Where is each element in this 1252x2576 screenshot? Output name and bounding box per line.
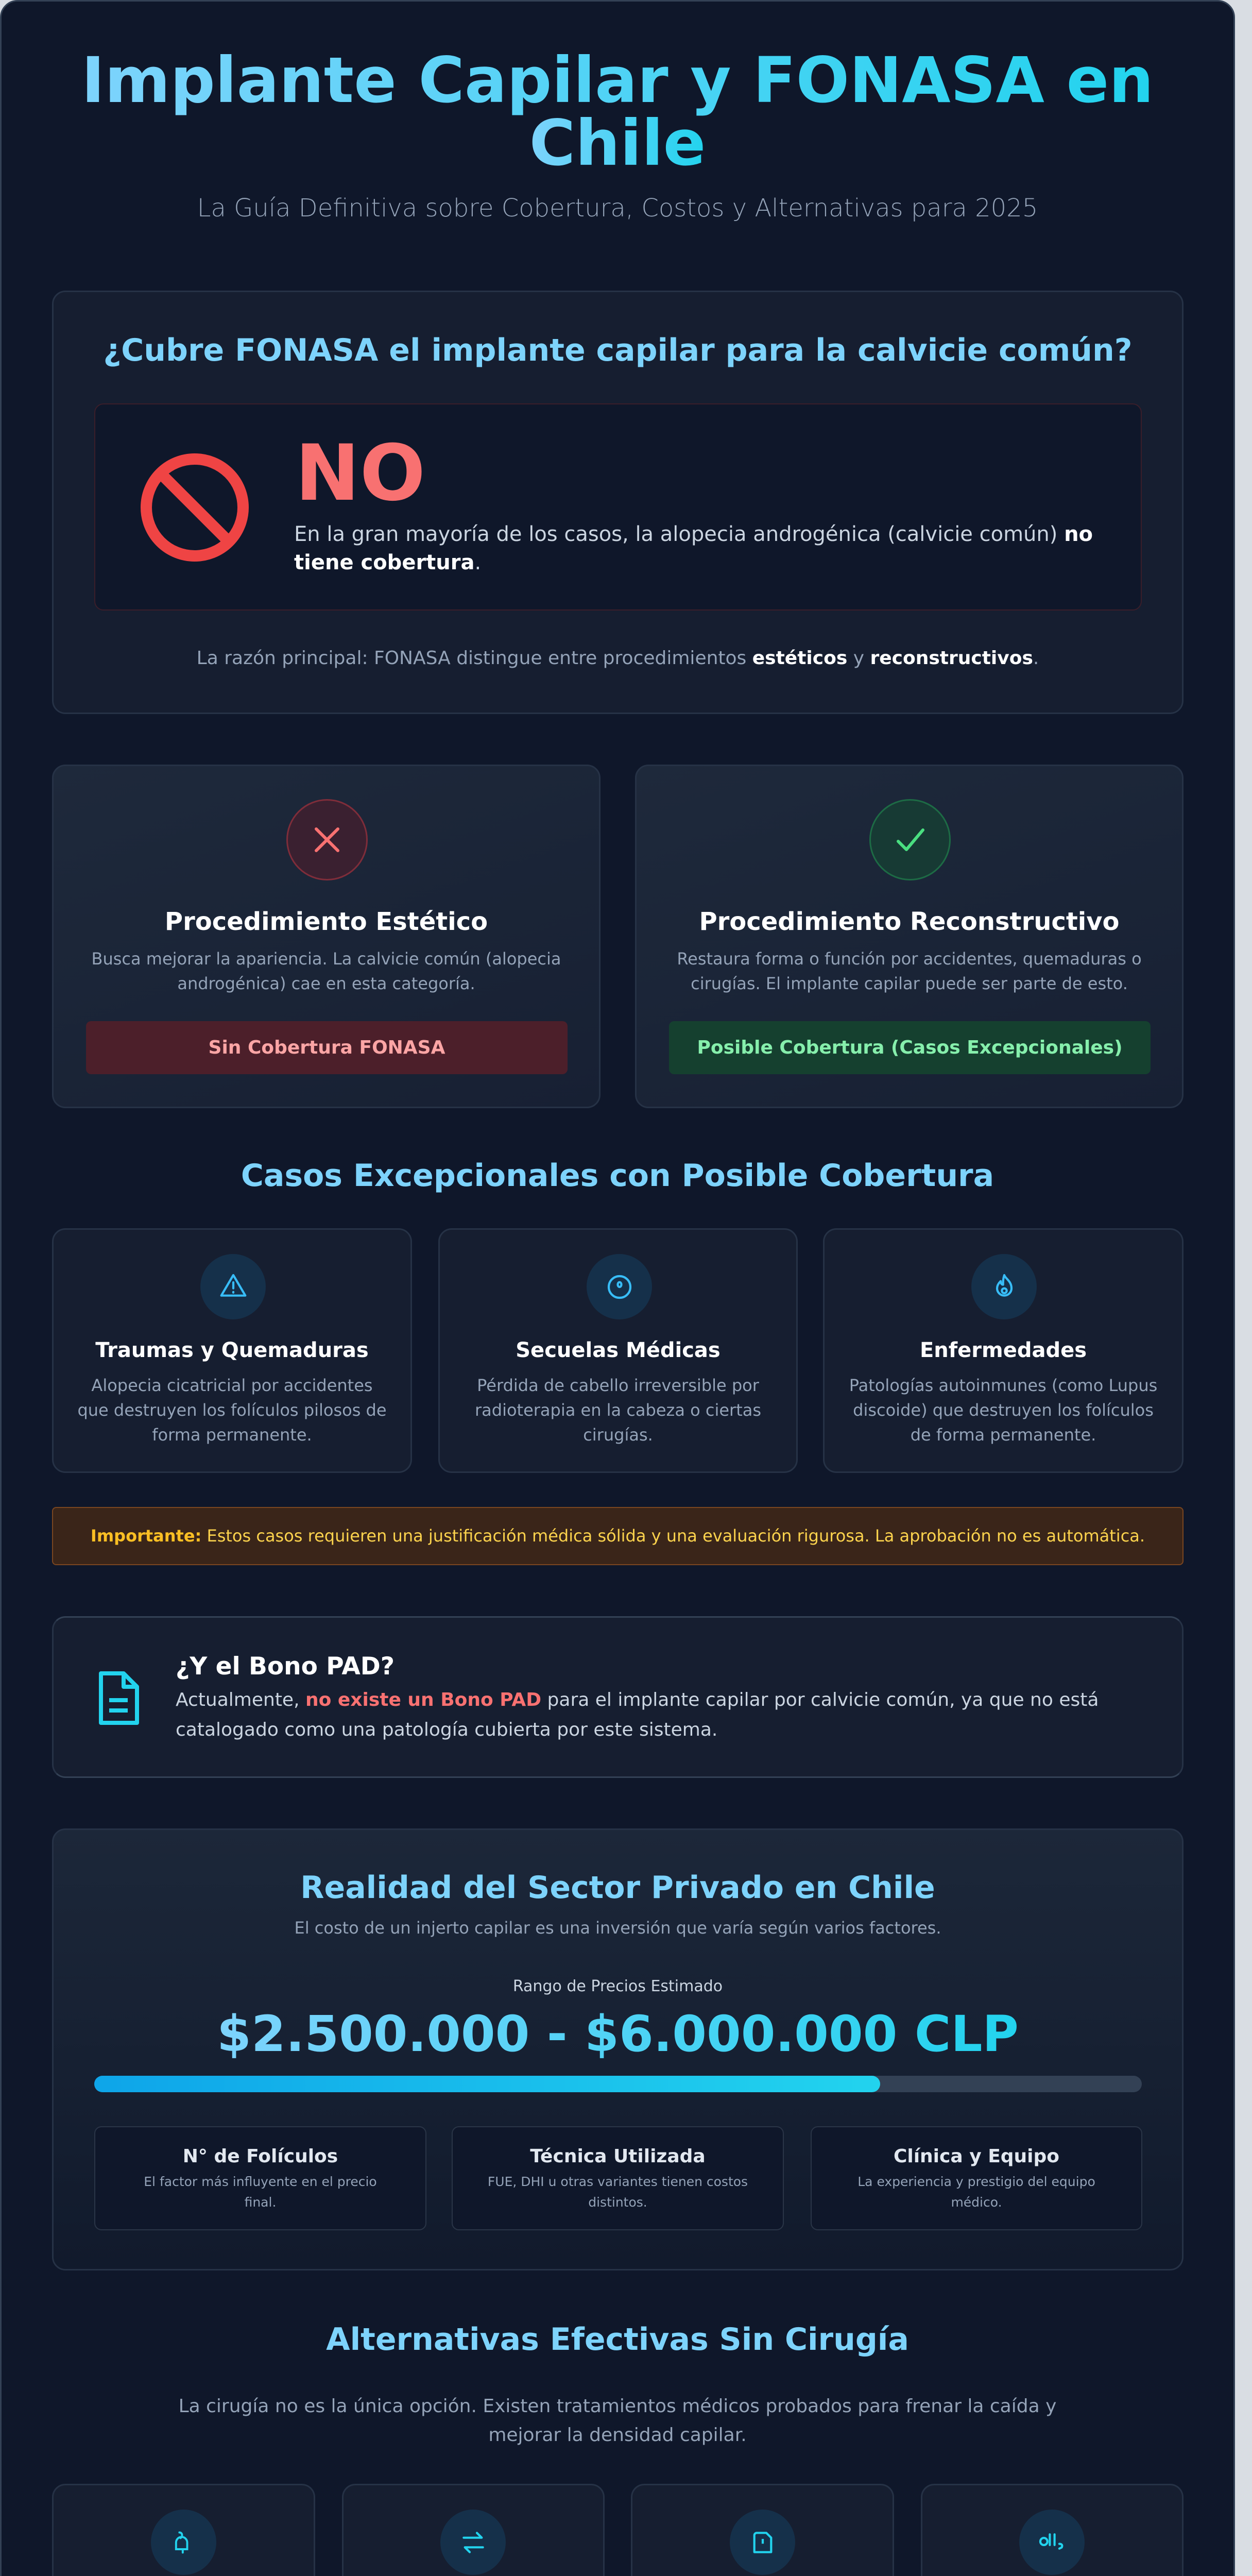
description: androgénica) cae en esta categoría. — [177, 974, 475, 993]
card: medical sequelae — [438, 1228, 798, 1473]
factor card: clinic: médico. — [951, 2195, 1002, 2210]
answer text — [294, 522, 1093, 574]
badge: possible coverage — [669, 1021, 1151, 1074]
intro text: alternatives — [179, 2396, 1056, 2446]
price label: Rango de Precios Estimado — [513, 1977, 723, 1995]
description: cirugías. — [583, 1425, 653, 1445]
icon: target — [587, 1254, 652, 1319]
title: Implante Capilar y FONASA en — [81, 44, 1154, 117]
title: Traumas y Quemaduras — [95, 1338, 369, 1362]
icon: vials — [1019, 2510, 1085, 2575]
intro text: alternatives: mejorar la densidad capilar. — [488, 2425, 747, 2446]
panel: aesthetic procedure — [52, 765, 601, 1108]
badge: no coverage — [86, 1021, 568, 1074]
callout: important: Importante: Estos casos requieren una justificación médica sólida y una evaluación rigurosa. La aprobación no es automática. — [91, 1526, 1145, 1546]
heading: Procedimiento Estético — [165, 907, 488, 936]
icon: syringe box — [730, 2510, 795, 2575]
description — [677, 949, 1142, 993]
card: diseases — [823, 1228, 1184, 1473]
factor card: technique: distintos. — [588, 2195, 647, 2210]
icon: pill — [151, 2510, 216, 2575]
description: que destruyen los folículos pilosos de — [77, 1400, 387, 1420]
factor card: technique — [452, 2126, 784, 2230]
icon: warning — [200, 1254, 266, 1319]
bar chart: price range — [94, 2076, 1142, 2092]
reason text: La razón principal: FONASA distingue entre procedimientos estéticos y reconstructivos. — [197, 648, 1039, 669]
answer box: NO — [94, 403, 1142, 611]
description: forma permanente. — [152, 1425, 312, 1445]
card: biostimulation — [921, 2484, 1184, 2576]
description: Restaura forma o función por accidentes, quemaduras o — [677, 949, 1142, 969]
description: cirugías. El implante capilar puede ser parte de esto. — [691, 974, 1128, 993]
answer text: tiene cobertura. — [294, 551, 481, 574]
subheading: El costo de un injerto capilar es una inversión que varía según varios factores. — [294, 1918, 941, 1938]
factor card: clinic: Clínica y Equipo — [894, 2146, 1059, 2167]
title: Enfermedades — [920, 1338, 1087, 1362]
heading: alternatives: Alternativas Efectivas Sin Cirugía — [326, 2321, 909, 2358]
description: Alopecia cicatricial por accidentes — [91, 1376, 373, 1395]
answer text: En la gran mayoría de los casos, la alopecia androgénica (calvicie común) no — [294, 522, 1093, 546]
badge: possible coverage: Posible Cobertura (Casos Excepcionales) — [697, 1037, 1123, 1058]
card: traumas — [52, 1228, 412, 1473]
heading: ¿Y el Bono PAD? — [176, 1652, 395, 1681]
icon: flame — [971, 1254, 1037, 1319]
badge: no coverage: Sin Cobertura FONASA — [209, 1037, 445, 1058]
factor card: clinic: La experiencia y prestigio del equipo — [857, 2174, 1095, 2189]
card: minoxidil — [342, 2484, 605, 2576]
panel: FONASA coverage question — [52, 291, 1184, 714]
description — [849, 1376, 1157, 1445]
heading: coverage question: ¿Cubre FONASA el implante capilar para la calvicie común? — [103, 332, 1133, 368]
factor card: technique: FUE, DHI u otras variantes tienen costos — [488, 2174, 748, 2189]
description: Busca mejorar la apariencia. La calvicie común (alopecia — [92, 949, 561, 969]
heading: Procedimiento Reconstructivo — [699, 907, 1120, 936]
factor card: clinic — [811, 2126, 1142, 2230]
description: radioterapia en la cabeza o ciertas — [475, 1400, 761, 1420]
icon: check — [869, 799, 951, 880]
title: Secuelas Médicas — [516, 1338, 721, 1362]
heading: exceptional cases: Casos Excepcionales con Posible Cobertura — [241, 1158, 994, 1194]
title: Chile — [529, 107, 706, 180]
big NO: NO — [295, 429, 425, 518]
description: Pérdida de cabello irreversible por — [477, 1376, 759, 1395]
price range: $2.500.000 - $6.000.000 CLP — [217, 2005, 1019, 2063]
factor card: follicles: final. — [245, 2195, 276, 2210]
callout: important — [52, 1507, 1184, 1565]
description — [77, 1376, 387, 1445]
panel: private sector — [52, 1828, 1184, 2270]
description: Patologías autoinmunes (como Lupus — [849, 1376, 1157, 1395]
card: mesotherapy — [631, 2484, 894, 2576]
factor card: follicles: El factor más influyente en el precio — [144, 2174, 377, 2189]
text: Actualmente, no existe un Bono PAD para el implante capilar por calvicie común, ya que no está — [176, 1689, 1099, 1710]
icon: document — [99, 1671, 139, 1725]
icon: arrows — [440, 2510, 506, 2575]
factor card: follicles — [94, 2126, 426, 2230]
icon: X — [286, 799, 368, 880]
factor card: technique: Técnica Utilizada — [530, 2146, 706, 2167]
card: oral drugs — [52, 2484, 315, 2576]
text — [176, 1689, 1099, 1740]
title — [81, 44, 1154, 180]
description: discoide) que destruyen los folículos — [853, 1400, 1154, 1420]
panel: reconstructive procedure — [635, 765, 1184, 1108]
factor card: follicles: N° de Folículos — [183, 2146, 338, 2167]
intro text: alternatives: La cirugía no es la única opción. Existen tratamientos médicos probados para frenar la caída y — [179, 2396, 1056, 2417]
panel: Bono PAD — [52, 1616, 1184, 1778]
text: catalogado como una patología cubierta por este sistema. — [176, 1719, 717, 1740]
description: de forma permanente. — [911, 1425, 1096, 1445]
description — [475, 1376, 761, 1445]
subtitle: La Guía Definitiva sobre Cobertura, Costos y Alternativas para 2025 — [197, 194, 1038, 223]
icon: prohibited — [141, 453, 249, 562]
heading: Realidad del Sector Privado en Chile — [300, 1870, 935, 1906]
description — [92, 949, 561, 993]
